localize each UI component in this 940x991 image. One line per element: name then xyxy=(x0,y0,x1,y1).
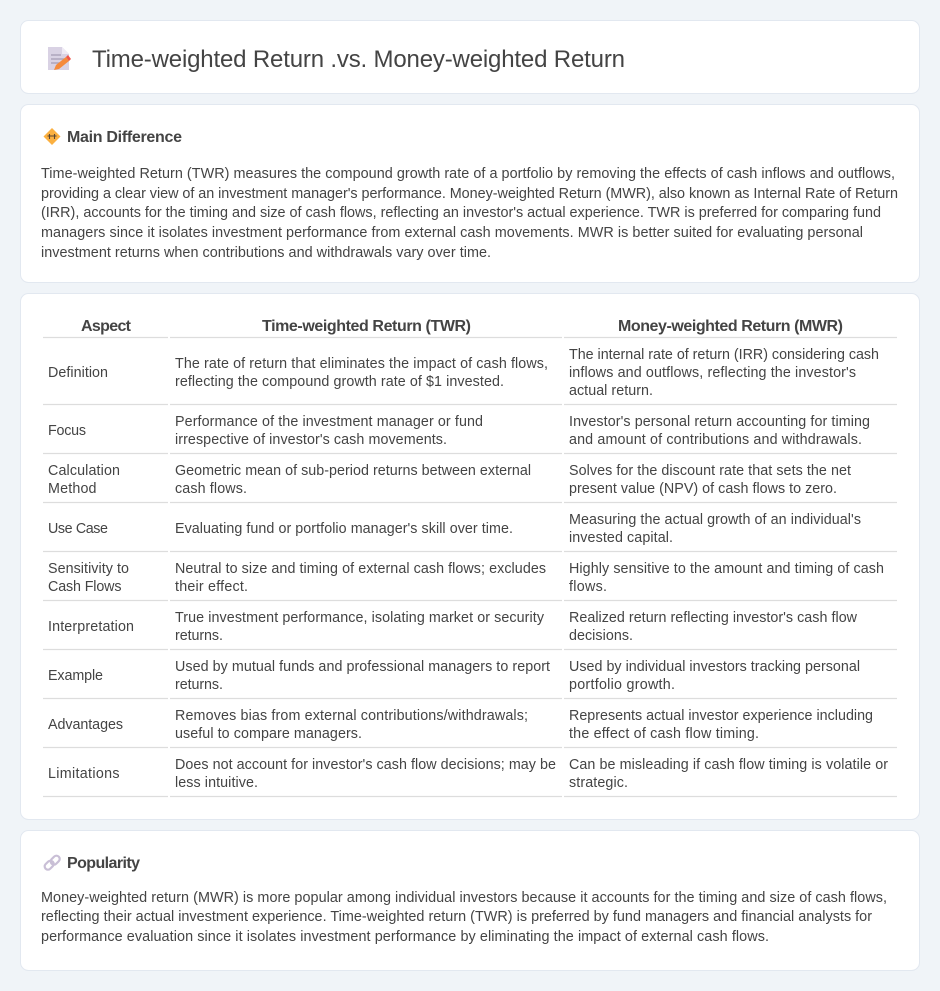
row: advantages xyxy=(43,708,897,748)
row: sensitivity to cash flows: Sensitivity to xyxy=(48,561,129,577)
row: example xyxy=(43,659,897,698)
row: limitations: Limitations xyxy=(48,766,120,782)
row: calculation method xyxy=(43,463,897,502)
text block: main difference xyxy=(41,166,898,261)
row: example: returns. xyxy=(175,677,223,693)
text block: main difference: (IRR), accounts for the timing and size of cash flows, reflecting an investor's actual experience. TWR is preferred for comparing fund xyxy=(41,205,881,221)
row: sensitivity to cash flows: Highly sensitive to the amount and timing of cash xyxy=(569,561,884,577)
row: limitations xyxy=(43,757,897,796)
row: use case: Use Case xyxy=(48,521,108,537)
row: focus: Investor's personal return accounting for timing xyxy=(569,414,870,430)
row: use case: Measuring the actual growth of an individual's xyxy=(569,512,861,528)
table header: Time-weighted Return (TWR) xyxy=(262,318,471,335)
row: definition xyxy=(43,347,897,404)
icon: document with pencil xyxy=(48,47,71,70)
row: example: portfolio growth. xyxy=(569,677,675,693)
row: focus: and amount of contributions and withdrawals. xyxy=(569,432,862,448)
row: example: Used by individual investors tracking personal xyxy=(569,659,860,675)
row: sensitivity to cash flows: Neutral to size and timing of external cash flows; excludes xyxy=(175,561,546,577)
row: limitations: less intuitive. xyxy=(175,775,258,791)
row: focus: Performance of the investment manager or fund xyxy=(175,414,483,430)
row: focus: Focus xyxy=(48,423,86,439)
row: interpretation: Realized return reflecting investor's cash flow xyxy=(569,610,858,626)
row: interpretation: decisions. xyxy=(569,628,633,644)
table header xyxy=(43,318,897,338)
row: calculation method: present value (NPV) of cash flows to zero. xyxy=(569,481,837,497)
row: interpretation: returns. xyxy=(175,628,223,644)
text block: main difference: managers since it isolates investment performance from external cash movements. MWR is better suited for evaluating personal xyxy=(41,225,863,241)
text block: popularity: reflecting their actual investment experience. Time-weighted return (TWR) is preferred by fund managers and financial analysts for xyxy=(41,909,872,925)
row: definition: The rate of return that eliminates the impact of cash flows, xyxy=(175,356,548,372)
row: use case xyxy=(43,512,897,552)
row: interpretation: Interpretation xyxy=(48,619,134,635)
row: definition: actual return. xyxy=(569,383,653,399)
heading: popularity: Popularity xyxy=(67,855,140,872)
row: calculation method: Method xyxy=(48,481,97,497)
title: Time-weighted Return .vs. Money-weighted Return xyxy=(92,46,625,73)
row: sensitivity to cash flows: Cash Flows xyxy=(48,579,122,595)
row: example: Example xyxy=(48,668,103,684)
row: example: Used by mutual funds and professional managers to report xyxy=(175,659,550,675)
text block: main difference: providing a clear view of an investment manager's performance. Money-weighted Return (MWR), also known as Internal Rate of Return xyxy=(41,186,898,202)
row: sensitivity to cash flows xyxy=(43,561,897,600)
table header: Money-weighted Return (MWR) xyxy=(618,318,843,335)
text block: popularity: Money-weighted return (MWR) is more popular among individual investors because it accounts for the timing and size of cash flows, xyxy=(41,890,887,906)
row: calculation method: cash flows. xyxy=(175,481,247,497)
panel: title card xyxy=(20,20,920,94)
row: interpretation: True investment performance, isolating market or security xyxy=(175,610,545,626)
row: focus: irrespective of investor's cash movements. xyxy=(175,432,447,448)
row: definition: inflows and outflows, reflecting the investor's xyxy=(569,365,856,381)
text block: main difference: Time-weighted Return (TWR) measures the compound growth rate of a portfolio by removing the effects of cash inflows and outflows, xyxy=(41,166,895,182)
row: advantages: useful to compare managers. xyxy=(175,726,362,742)
row: advantages: Advantages xyxy=(48,717,123,733)
row: definition: The internal rate of return (IRR) considering cash xyxy=(569,347,879,363)
row: advantages: Represents actual investor experience including xyxy=(569,708,873,724)
icon: chain link xyxy=(43,854,61,871)
panel: main difference xyxy=(20,104,920,282)
row: focus xyxy=(43,414,897,454)
panel: popularity xyxy=(20,830,920,970)
row: limitations: Can be misleading if cash flow timing is volatile or xyxy=(569,757,888,773)
text block: popularity xyxy=(41,890,887,945)
row: calculation method: Calculation xyxy=(48,463,120,479)
row: definition: reflecting the compound growth rate of $1 invested. xyxy=(175,374,504,390)
row: definition: Definition xyxy=(48,365,108,381)
row: calculation method: Solves for the discount rate that sets the net xyxy=(569,463,851,479)
text block: popularity: performance evaluation since it isolates investment performance by eliminating the impact of external cash flows. xyxy=(41,929,769,945)
row: advantages: the effect of cash flow timing. xyxy=(569,726,759,742)
icon: orange diamond xyxy=(44,128,60,145)
table header: Aspect xyxy=(81,318,132,335)
text block: main difference: investment returns when contributions and withdrawals vary over time. xyxy=(41,245,491,261)
heading: main difference: Main Difference xyxy=(67,129,182,146)
row: advantages: Removes bias from external contributions/withdrawals; xyxy=(175,708,528,724)
panel: comparison table xyxy=(20,294,920,820)
row: use case: Evaluating fund or portfolio manager's skill over time. xyxy=(175,521,513,537)
row: use case: invested capital. xyxy=(569,530,673,546)
row: limitations: strategic. xyxy=(569,775,628,791)
row: sensitivity to cash flows: flows. xyxy=(569,579,607,595)
row: sensitivity to cash flows: their effect. xyxy=(175,579,248,595)
row: interpretation xyxy=(43,610,897,650)
row: calculation method: Geometric mean of sub-period returns between external xyxy=(175,463,531,479)
row: limitations: Does not account for investor's cash flow decisions; may be xyxy=(175,757,556,773)
